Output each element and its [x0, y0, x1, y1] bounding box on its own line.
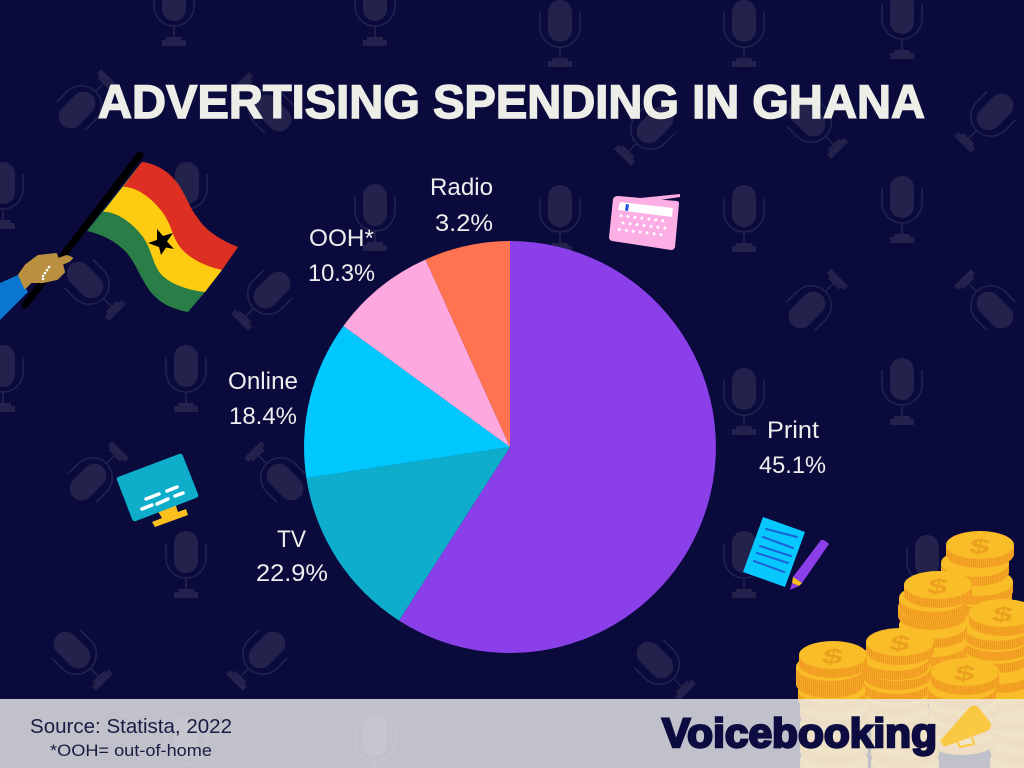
icon: megaphone: [940, 706, 991, 747]
label: OOH: 10.3%: [308, 260, 375, 287]
label: TV: [256, 526, 328, 587]
source note: Source: Statista, 2022: [30, 716, 232, 738]
label: Online: [228, 368, 298, 430]
label: Radio: Radio: [430, 174, 493, 201]
label: Print: [759, 417, 826, 479]
icon: radio: [609, 194, 680, 250]
label: Radio: [430, 174, 493, 237]
label: Radio: 3.2%: [435, 210, 493, 237]
label: Online: Online: [228, 368, 298, 395]
label: Print: Print: [767, 417, 819, 444]
slice: Print: [399, 241, 716, 653]
slice: TV: [306, 447, 510, 621]
label: Print: 45.1%: [759, 452, 826, 479]
slice: OOH: [343, 260, 510, 447]
slice: Radio: [426, 241, 510, 447]
source note: *OOH= out-of-home: [50, 741, 212, 760]
title: ADVERTISING SPENDING IN GHANA: [98, 75, 925, 128]
label: OOH: [308, 225, 375, 287]
icon: stacks of gold coins: [796, 531, 1024, 768]
slice: Online: [304, 326, 510, 478]
label: Online: 18.4%: [229, 403, 297, 430]
icon: hand waving Ghana flag: [0, 155, 238, 320]
source note: [30, 716, 232, 760]
label: OOH: OOH*: [309, 225, 374, 252]
label: TV: TV: [277, 526, 306, 553]
footer band: [0, 699, 1024, 768]
logo: Voicebooking: Voicebooking: [662, 710, 937, 756]
pie chart: [304, 241, 716, 653]
icon: paper and pencil: [743, 517, 829, 590]
label: TV: 22.9%: [256, 560, 328, 587]
icon: computer monitor: [117, 454, 198, 527]
